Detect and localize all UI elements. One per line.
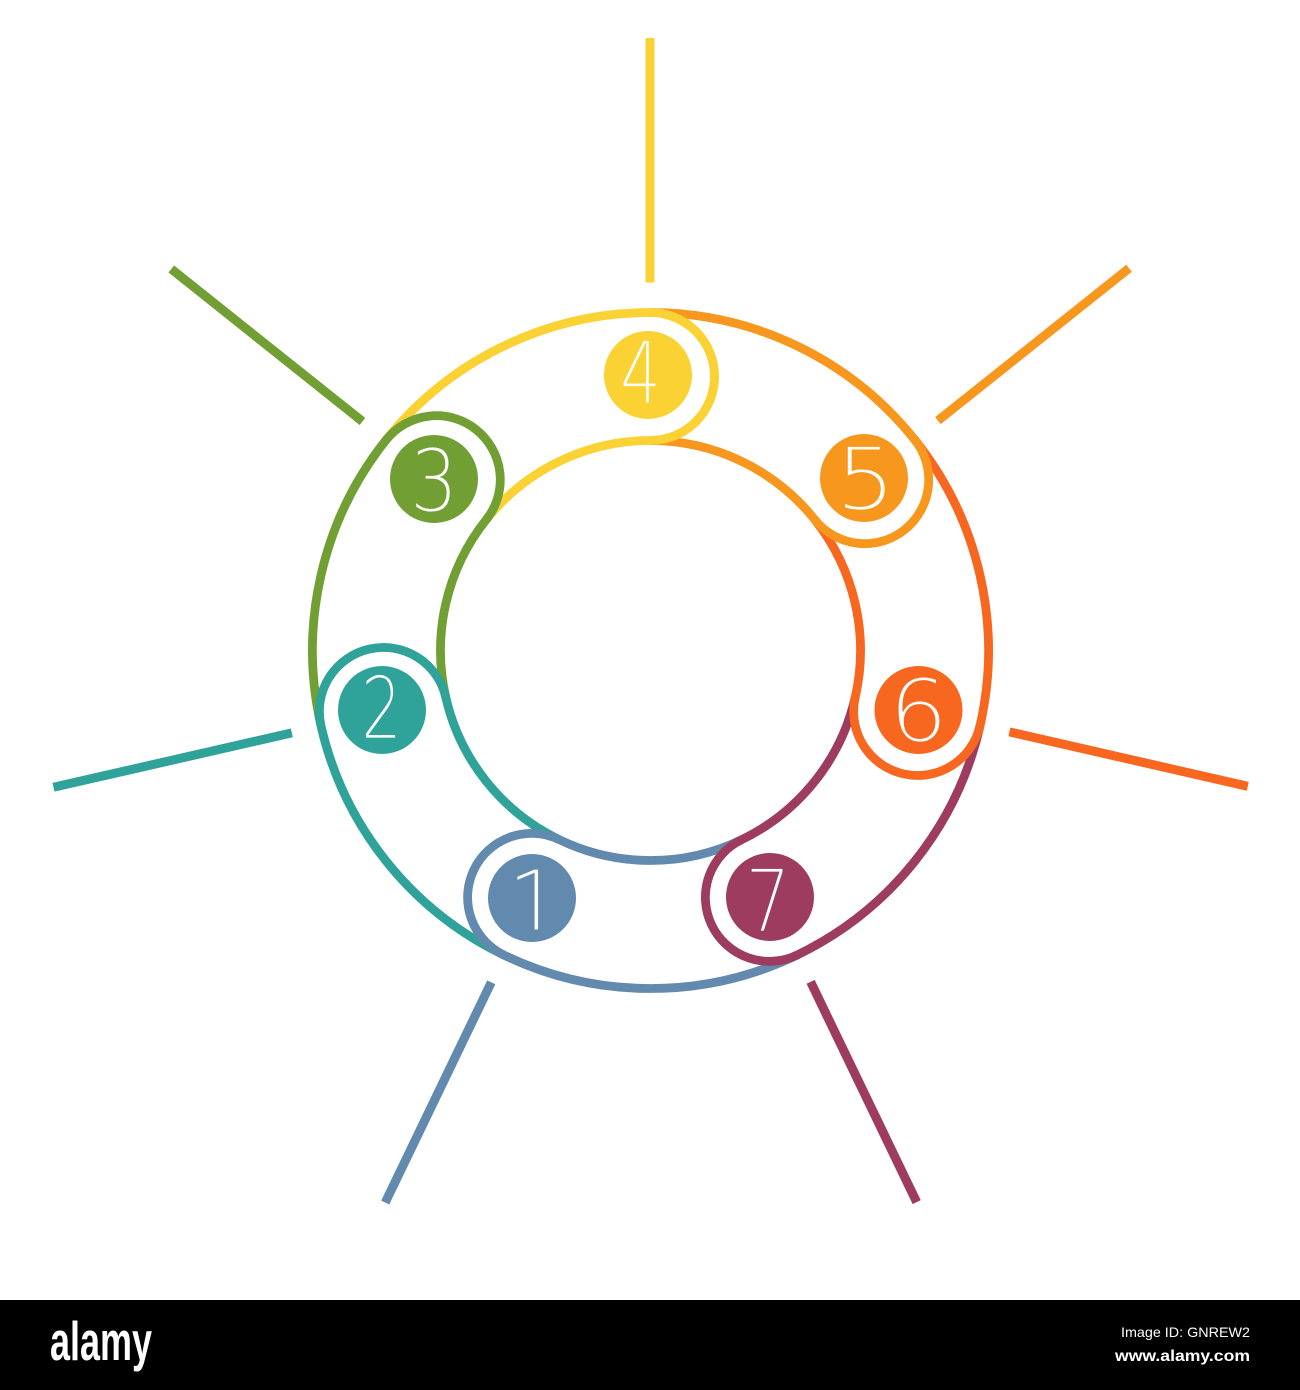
ring segment: step 5 (588, 233, 955, 619)
badge: step 5: 5 (835, 430, 896, 530)
badge: step 6: 6 (889, 662, 948, 762)
ring segment: step 4 (386, 312, 714, 520)
ray: step 4 (646, 38, 654, 282)
badge: step 4 (604, 323, 692, 423)
badge: step 5 (820, 430, 908, 530)
ray: step 6 (1009, 732, 1248, 786)
ring segment: step 2 (307, 617, 582, 983)
ray: step 5 (938, 268, 1129, 421)
ring segment: step 3 (221, 390, 588, 776)
ring segment: step 7 (650, 654, 1035, 983)
ray: step 7 (811, 982, 917, 1202)
ring segment: step 1 (446, 741, 832, 1070)
badge: step 3 (390, 432, 478, 532)
ring cap: step 4 overlapping step 5 (650, 312, 714, 440)
badge: step 6 (874, 662, 962, 762)
image id: Image ID: GNREW2 (1121, 1324, 1250, 1340)
badge: step 4: 4 (620, 323, 661, 423)
website: www.alamy.com (1114, 1348, 1250, 1365)
badge: step 3: 3 (410, 432, 458, 532)
badge: step 1: 1 (508, 851, 562, 957)
badge: step 2 (338, 658, 426, 758)
ray: step 2 (53, 733, 292, 787)
badge: step 1 (488, 854, 576, 942)
ray: step 1 (385, 982, 491, 1203)
badge: step 7 (726, 851, 814, 952)
badge: step 2: 2 (361, 658, 402, 758)
ray: step 3 (171, 269, 362, 421)
footer bar (0, 1300, 1300, 1390)
ring segment: step 6 (764, 422, 1039, 788)
footer logo: alamy (50, 1310, 152, 1372)
badge: step 7: 7 (746, 851, 790, 952)
